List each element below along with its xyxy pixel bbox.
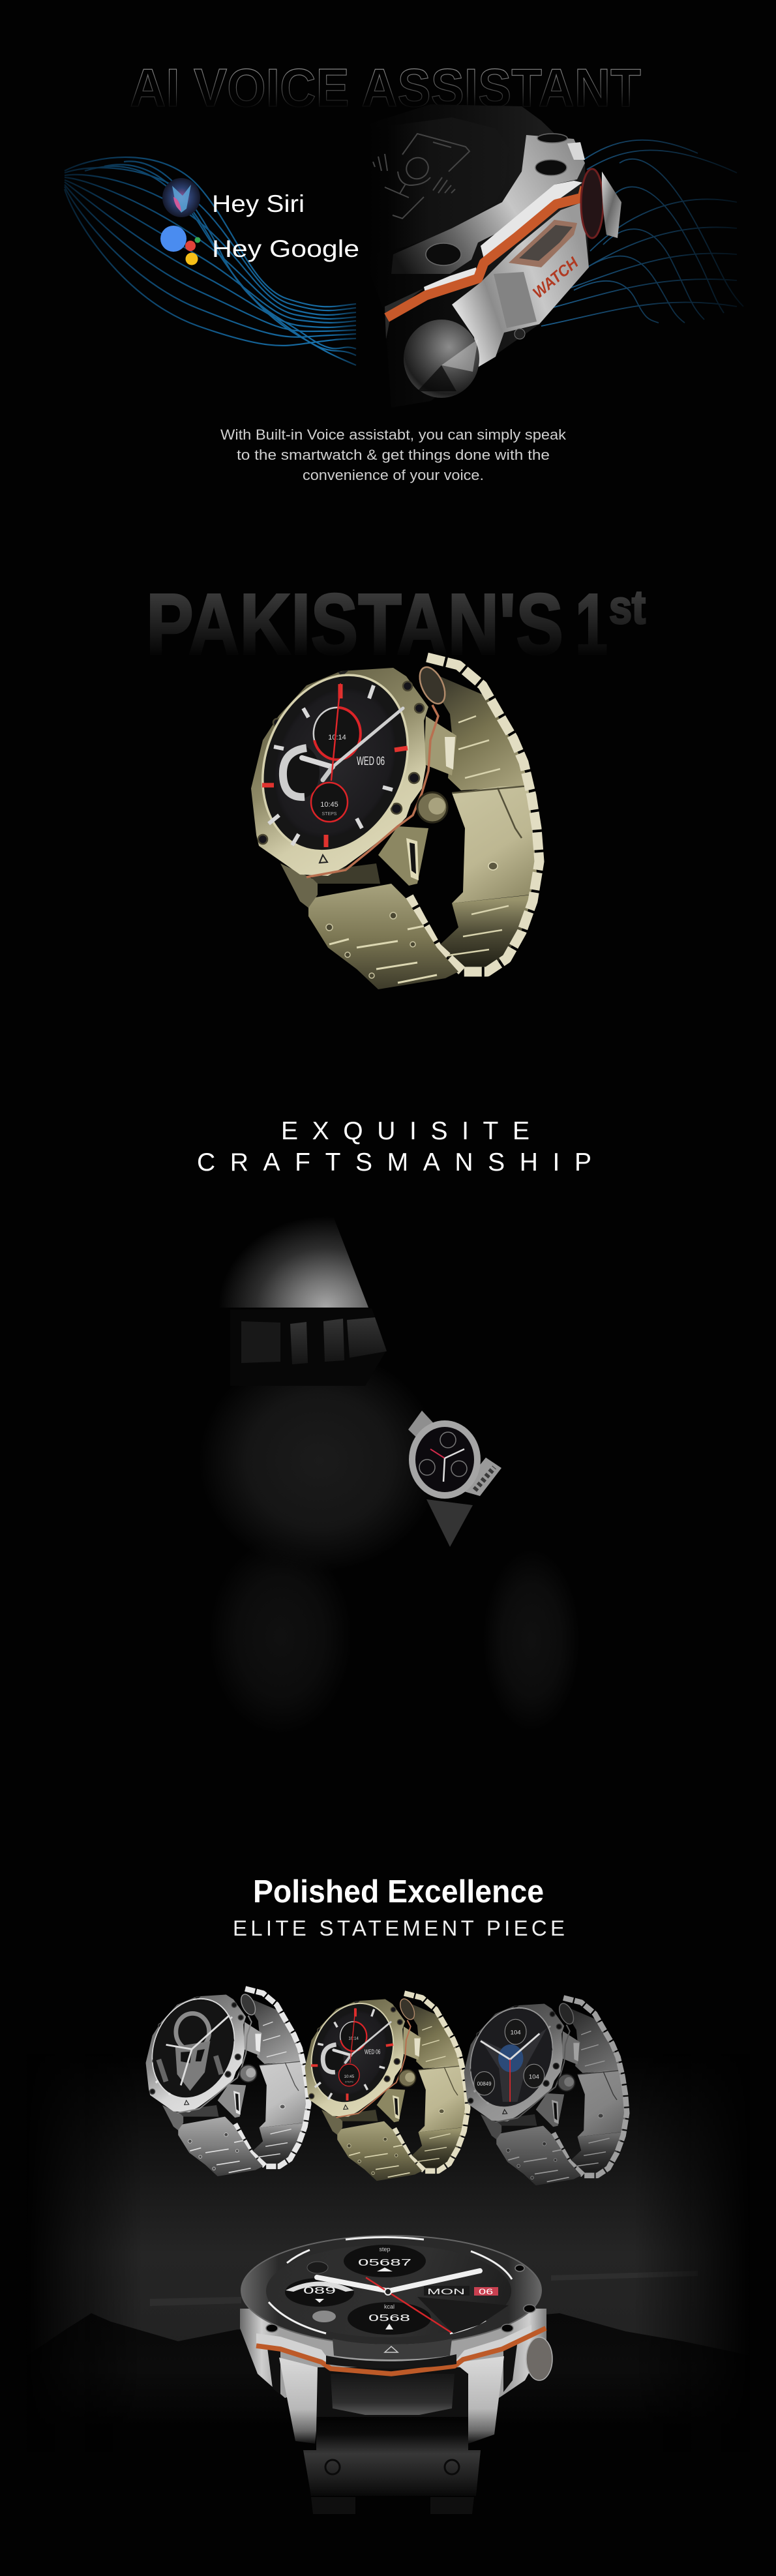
description text: With Built-in Voice assistabt, you can simply speak <box>220 427 567 443</box>
red hour markers <box>262 684 408 847</box>
top right stub <box>567 142 585 160</box>
case underside <box>306 863 380 884</box>
front band <box>308 884 458 989</box>
upper white strip <box>424 181 582 295</box>
lower back band <box>437 895 533 970</box>
heading: PAKISTAN'S 1st: PAKISTAN'S <box>146 577 563 673</box>
subdial: heart rate: 089 <box>303 2286 336 2296</box>
right lug <box>455 2356 504 2444</box>
plate cut-out <box>509 220 577 267</box>
description text <box>220 427 567 483</box>
cloud streaks <box>150 2272 656 2306</box>
left lug <box>280 863 318 908</box>
subdial: steps <box>344 2245 426 2277</box>
dial bright arcs <box>269 2237 512 2333</box>
watch side close-up <box>365 104 621 408</box>
upper back band <box>435 674 530 790</box>
subdial: calories: kcal <box>384 2303 395 2310</box>
grey block <box>494 272 537 328</box>
heading: Exquisite craftsmanship: EXQUISITE <box>281 1117 530 1145</box>
right crown <box>526 2337 552 2380</box>
pin hole <box>515 329 525 339</box>
copper line <box>306 705 438 877</box>
blue sound wave left <box>65 157 356 365</box>
bezel <box>241 2236 541 2345</box>
dark watch Y-shaped dial <box>456 1996 566 2119</box>
date: WED 06: WED 06 <box>357 755 385 768</box>
screws <box>426 134 567 265</box>
clasp pin <box>488 862 498 870</box>
description text: convenience of your voice. <box>303 467 484 483</box>
shirt wedge <box>218 1216 368 1308</box>
center hub <box>385 2288 391 2295</box>
orange accent line <box>387 187 585 318</box>
triangle markers <box>320 671 347 863</box>
strap upper <box>303 2419 481 2496</box>
subdial: steps: 10:45 <box>320 801 338 809</box>
heading: Polished Excellence: Polished Excellence <box>253 1874 544 1910</box>
lower right dial shading <box>417 2297 509 2333</box>
heading: Exquisite craftsmanship <box>197 1117 591 1176</box>
band bars <box>443 716 509 956</box>
shoulder plates <box>256 2325 531 2362</box>
silver watch skeleton dial <box>138 1987 248 2110</box>
dark lower side <box>385 288 424 339</box>
gold watch <box>237 653 539 989</box>
dark columns <box>267 2344 517 2417</box>
date: MON 06: 06 <box>479 2288 493 2296</box>
trousers <box>199 1350 440 1572</box>
section: Polished excellence <box>56 1880 720 2514</box>
glass back <box>331 2374 455 2415</box>
subdial: heart rate <box>285 2278 354 2307</box>
outer links <box>409 657 539 972</box>
clasp details <box>452 786 528 838</box>
heading: Exquisite craftsmanship: CRAFTSMANSHIP <box>197 1148 591 1176</box>
icon: Google Assistant <box>160 226 201 265</box>
subdial: steps: 05687 <box>358 2256 411 2268</box>
front band pins <box>326 912 415 978</box>
hour markers <box>269 685 393 845</box>
person in dark suit <box>199 1216 580 1735</box>
mountains <box>64 2313 711 2382</box>
heading: PAKISTAN'S 1st: 1 <box>575 577 608 673</box>
hand <box>426 1499 473 1547</box>
left lug <box>279 2358 318 2444</box>
sky and mountain backdrop <box>56 2101 720 2382</box>
clasp plate <box>452 786 537 903</box>
case side <box>240 2309 546 2398</box>
lower right leg <box>483 1549 580 1731</box>
strap lower links <box>311 2497 474 2514</box>
date: MON 06: MON <box>427 2288 465 2296</box>
large front-facing watch <box>240 2236 552 2514</box>
blue sound wave right <box>541 140 743 326</box>
side lug with WATCH <box>424 716 456 775</box>
subheading: Elite statement piece: ELITE STATEMENT PIECE <box>233 1916 565 1940</box>
title: AI voice assistant: AI VOICE ASSISTANT <box>130 57 641 118</box>
bezel triangle marker <box>385 2346 398 2352</box>
dark watch Y-shaped dial: 00849 <box>477 2081 492 2087</box>
subdial: heart rate <box>314 708 361 760</box>
dark watch Y-shaped dial: 104 <box>529 2073 540 2080</box>
description text: to the smartwatch & get things done with the <box>237 447 550 463</box>
case <box>251 668 428 876</box>
front band bars <box>329 926 437 983</box>
orange accent band <box>256 2328 546 2374</box>
top crown <box>581 169 621 238</box>
subdial: calories <box>348 2302 431 2335</box>
dial <box>266 2245 511 2337</box>
section: Pakistan's 1st <box>146 577 646 989</box>
dark watch <box>456 1996 627 2185</box>
compass and moon icons <box>307 2262 336 2322</box>
sky glow <box>56 2101 720 2349</box>
subdial: steps: step <box>379 2246 391 2253</box>
case back <box>365 104 589 408</box>
strap holes <box>325 2460 459 2474</box>
crowns <box>415 663 450 822</box>
subdial: steps: STEPS <box>322 812 337 816</box>
subdial: battery <box>283 746 320 798</box>
date: MON 06 <box>424 2286 498 2296</box>
section: Exquisite craftsmanship <box>197 1117 591 1735</box>
gold watch <box>297 1991 468 2181</box>
dark watch Y-shaped dial: 104 <box>511 2029 521 2036</box>
right lug with hole <box>378 826 428 886</box>
silver bezel <box>391 135 585 274</box>
lower left leg <box>209 1539 352 1735</box>
subdial: steps <box>311 783 348 822</box>
WATCH engraved label: WATCH <box>530 254 582 302</box>
small silver watch <box>408 1411 501 1499</box>
section: AI voice assistant <box>65 57 743 483</box>
lower crown <box>404 320 479 398</box>
textured bezel front <box>333 2339 452 2359</box>
subdial: heart rate: 10:14 <box>328 734 346 741</box>
side plate <box>452 202 589 367</box>
screen with microphone graphic <box>365 117 509 256</box>
silver watch <box>138 1986 308 2176</box>
bezel lower lip <box>326 2354 456 2369</box>
heading: PAKISTAN'S 1st: st <box>609 582 646 634</box>
icon: Siri <box>162 178 200 217</box>
hands <box>317 2271 480 2332</box>
belt <box>230 1308 387 1386</box>
label: Hey Siri: Hey Siri <box>212 190 305 217</box>
case screws <box>258 681 424 844</box>
subdial: calories: 0568 <box>368 2312 410 2323</box>
bezel screws <box>266 2265 535 2332</box>
watch hands <box>302 684 403 780</box>
dial <box>237 653 433 873</box>
label: Hey Google: Hey Google <box>212 235 359 262</box>
